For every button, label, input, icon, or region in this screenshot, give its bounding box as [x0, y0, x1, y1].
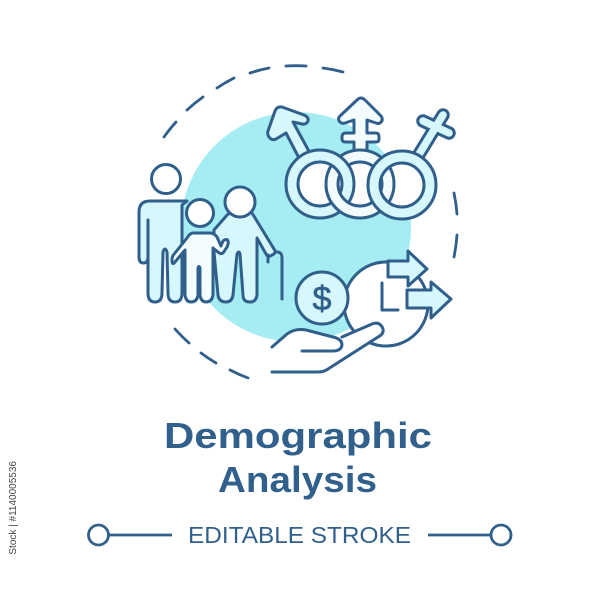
icon: gender symbols: [268, 98, 449, 219]
dollar sign: $: [313, 280, 332, 318]
icon: money in hand: [272, 251, 451, 372]
stock id text: Stock | #1140005536: [8, 461, 19, 555]
grandmother: [214, 187, 282, 302]
arrow lower: [407, 282, 451, 318]
title: [164, 415, 432, 500]
hand: [272, 323, 383, 372]
man: [139, 164, 187, 302]
middle symbol arrow and cross: [338, 98, 382, 156]
arrow upper: [388, 251, 427, 286]
middle ring overlap: [324, 186, 352, 214]
right ring: [368, 151, 436, 219]
icon: family group: [139, 164, 282, 302]
editable stroke label: EDITABLE STROKE: [188, 522, 411, 548]
clock circle: [344, 262, 428, 346]
title: Demographic: [164, 415, 432, 456]
dashed ring: [164, 66, 457, 378]
child: [172, 200, 228, 302]
title: Analysis: [218, 459, 377, 500]
middle ring: [326, 150, 394, 218]
ring interiors: [296, 160, 426, 209]
background teal circle: [181, 112, 411, 342]
female cross: [418, 115, 449, 156]
clock hands: [382, 283, 398, 310]
infographic canvas: [8, 64, 512, 554]
editable stroke label: [88, 522, 511, 548]
male arrow: [268, 107, 311, 160]
dollar coin: [296, 272, 348, 324]
left ring: [286, 150, 354, 218]
